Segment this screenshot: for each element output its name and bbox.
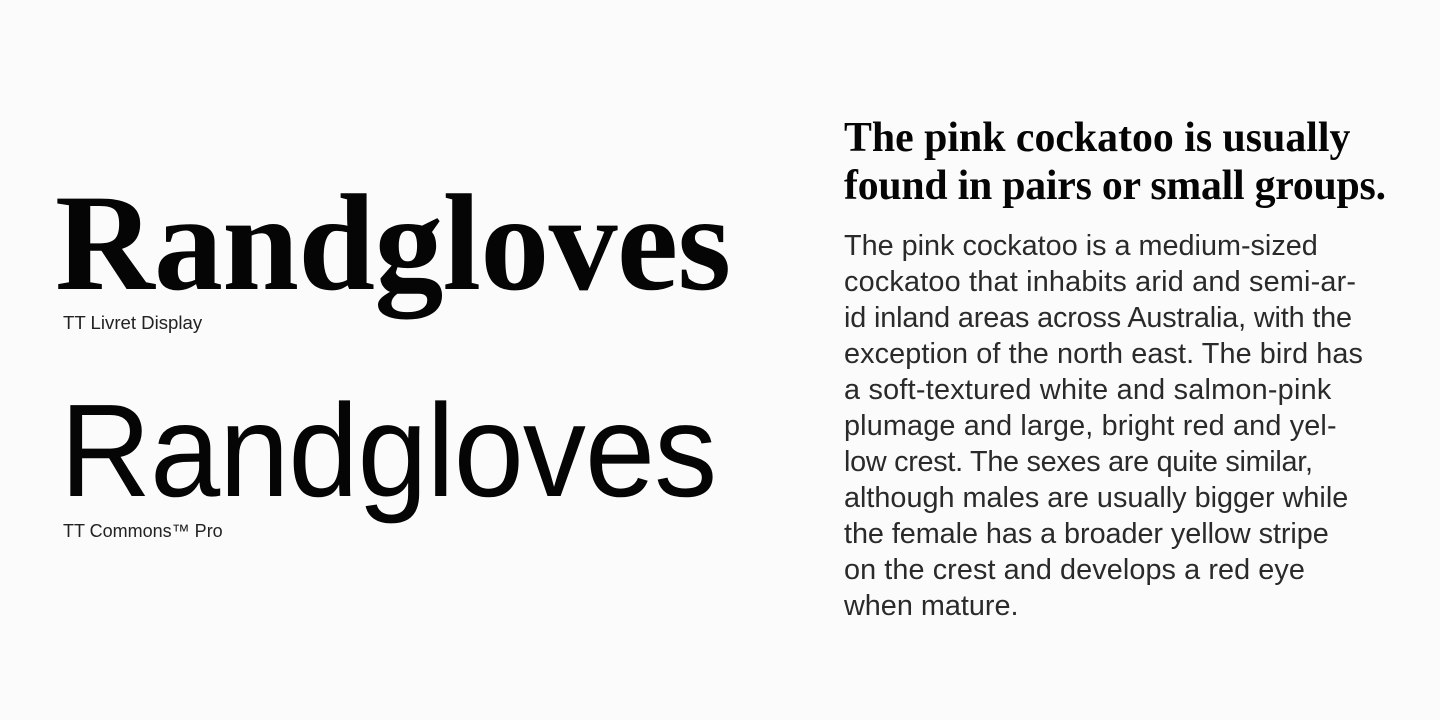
body paragraph: id inland areas across Australia, with the <box>844 302 1352 334</box>
body paragraph: the female has a broader yellow stripe <box>844 518 1329 550</box>
body paragraph <box>844 230 1363 622</box>
body paragraph: on the crest and develops a red eye <box>844 554 1305 586</box>
body paragraph: although males are usually bigger while <box>844 482 1348 514</box>
subheading: pink cockatoo: The pink cockatoo is usually <box>844 115 1350 161</box>
subheading: pink cockatoo <box>844 115 1386 209</box>
body paragraph: The pink cockatoo is a medium-sized <box>844 230 1318 262</box>
body paragraph: when mature. <box>844 590 1018 622</box>
body paragraph: plumage and large, bright red and yel- <box>844 410 1337 442</box>
body paragraph: low crest. The sexes are quite similar, <box>844 446 1313 478</box>
body paragraph: exception of the north east. The bird has <box>844 338 1363 370</box>
caption: TT Commons Pro: TT Commons™ Pro <box>63 521 223 541</box>
specimen heading: TT Commons Pro: Randgloves <box>60 377 716 524</box>
specimen heading: TT Livret Display: Randgloves <box>55 166 730 319</box>
subheading: pink cockatoo: found in pairs or small groups. <box>844 163 1386 209</box>
body paragraph: cockatoo that inhabits arid and semi-ar- <box>844 266 1356 298</box>
body paragraph: a soft-textured white and salmon-pink <box>844 374 1331 406</box>
caption: TT Livret Display: TT Livret Display <box>63 312 202 333</box>
